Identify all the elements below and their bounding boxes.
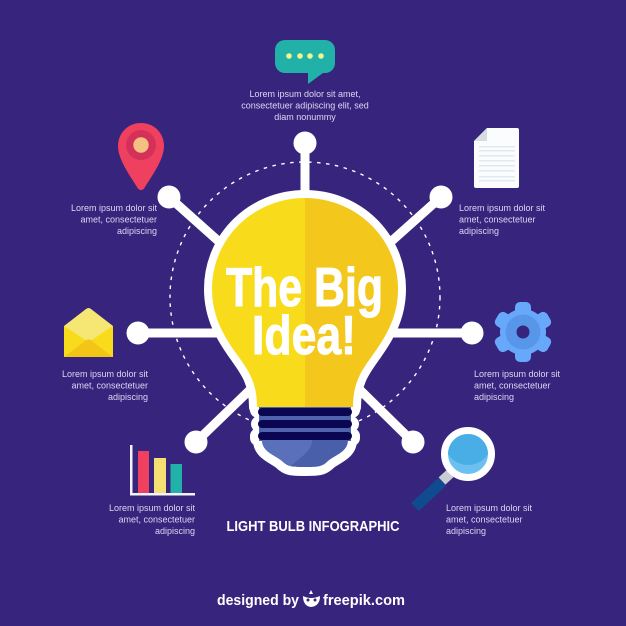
text: lower right [446, 503, 533, 536]
text: right: adipiscing [474, 392, 514, 402]
icon: speech bubble [275, 40, 335, 84]
text: left [62, 369, 148, 402]
icon: map pin [118, 123, 164, 190]
text: lower left: Lorem ipsum dolor sit [109, 503, 195, 513]
text: lower left: adipiscing [155, 526, 195, 536]
subtitle: LIGHT BULB INFOGRAPHIC [226, 518, 400, 535]
text: top: consectetuer adipiscing elit, sed [241, 100, 369, 110]
text: lower left [109, 503, 195, 536]
text: lower right: adipiscing [446, 526, 486, 536]
icon: magnifying glass [415, 430, 492, 507]
text: upper left [71, 203, 157, 236]
text: left: amet, consectetuer [71, 380, 148, 390]
text: right [474, 369, 561, 402]
text: top [241, 89, 369, 122]
text: left: Lorem ipsum dolor sit [62, 369, 148, 379]
text: top: Lorem ipsum dolor sit amet, [249, 89, 361, 99]
text: upper left: adipiscing [117, 226, 157, 236]
bulb headline [226, 256, 383, 366]
light bulb [212, 198, 398, 467]
icon: gear [493, 302, 553, 362]
icon: envelope [64, 308, 113, 357]
text: left: adipiscing [108, 392, 148, 402]
bulb headline: The Big [226, 256, 383, 318]
text: lower left: amet, consectetuer [118, 514, 195, 524]
text: top: diam nonummy [274, 112, 336, 122]
connector nodes [127, 132, 483, 453]
icon: document [474, 128, 519, 188]
text: right: amet, consectetuer [474, 380, 551, 390]
footer credit: designed by [217, 592, 300, 609]
bulb headline: Idea! [252, 304, 356, 366]
text: lower right: amet, consectetuer [446, 514, 523, 524]
text: upper left: Lorem ipsum dolor sit [71, 203, 157, 213]
text: right: Lorem ipsum dolor sit [474, 369, 561, 379]
footer credit [217, 590, 405, 609]
text: lower right: Lorem ipsum dolor sit [446, 503, 533, 513]
text: upper left: amet, consectetuer [80, 214, 157, 224]
text: upper right: adipiscing [459, 226, 499, 236]
footer credit: freepik.com [323, 592, 405, 609]
text: upper right [459, 203, 546, 236]
text: upper right: Lorem ipsum dolor sit [459, 203, 546, 213]
text: upper right: amet, consectetuer [459, 214, 536, 224]
icon: bar chart [130, 445, 195, 496]
